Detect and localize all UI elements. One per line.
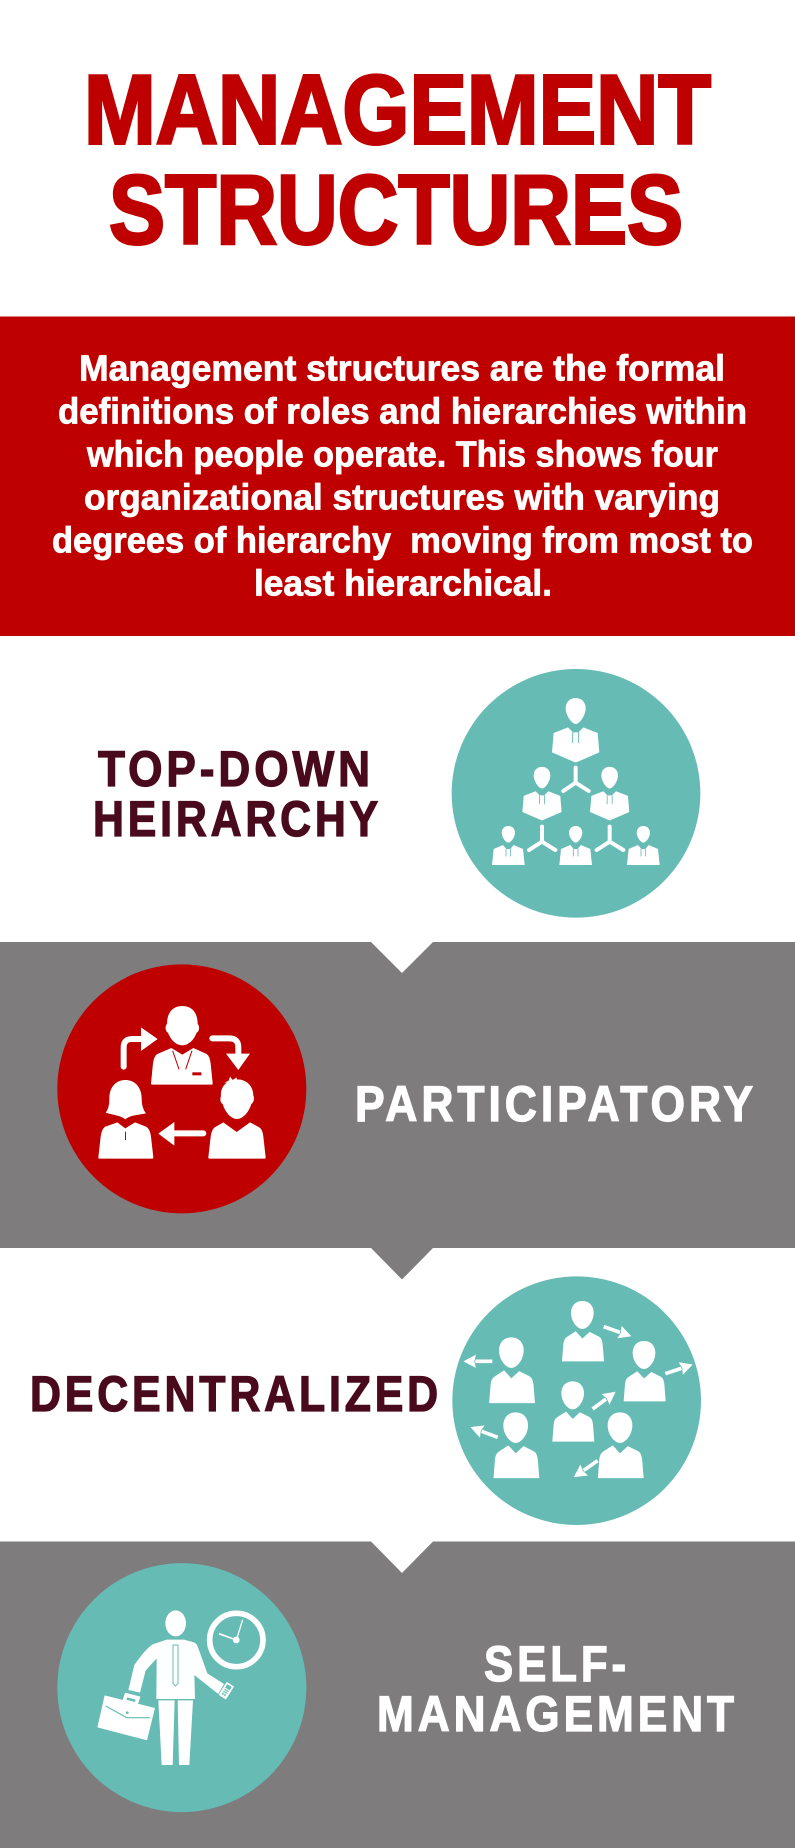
heading: top-down hierarchy: TOP-DOWN bbox=[98, 740, 374, 797]
icon: self-management bbox=[57, 1563, 306, 1812]
icon: decentralized bbox=[452, 1276, 701, 1525]
heading: self-management: SELF- bbox=[484, 1635, 630, 1692]
heading: self-management bbox=[377, 1635, 738, 1742]
text block: introduction: Management structures are the formal bbox=[79, 348, 725, 388]
text block: introduction: which people operate. This shows four bbox=[86, 434, 718, 474]
panel: participatory band bbox=[0, 942, 795, 1280]
title: MANAGEMENT bbox=[84, 54, 711, 164]
title: STRUCTURES bbox=[109, 154, 683, 264]
text block: introduction bbox=[52, 348, 753, 604]
panel: introduction bbox=[0, 316, 795, 636]
text block: introduction: least hierarchical. bbox=[254, 562, 552, 604]
text block: introduction: degrees of hierarchy moving from most to bbox=[52, 520, 753, 560]
heading: self-management: MANAGEMENT bbox=[377, 1685, 738, 1742]
text block: introduction: organizational structures with varying bbox=[84, 476, 720, 518]
text block: introduction: definitions of roles and hierarchies within bbox=[58, 390, 747, 432]
icon: participatory bbox=[57, 964, 306, 1213]
panel: self-management band bbox=[0, 1542, 795, 1848]
heading: top-down hierarchy bbox=[93, 740, 382, 847]
heading: decentralized: DECENTRALIZED bbox=[30, 1365, 442, 1422]
heading: top-down hierarchy: HEIRARCHY bbox=[93, 790, 382, 847]
icon: top-down hierarchy bbox=[452, 669, 700, 918]
title bbox=[84, 54, 711, 264]
